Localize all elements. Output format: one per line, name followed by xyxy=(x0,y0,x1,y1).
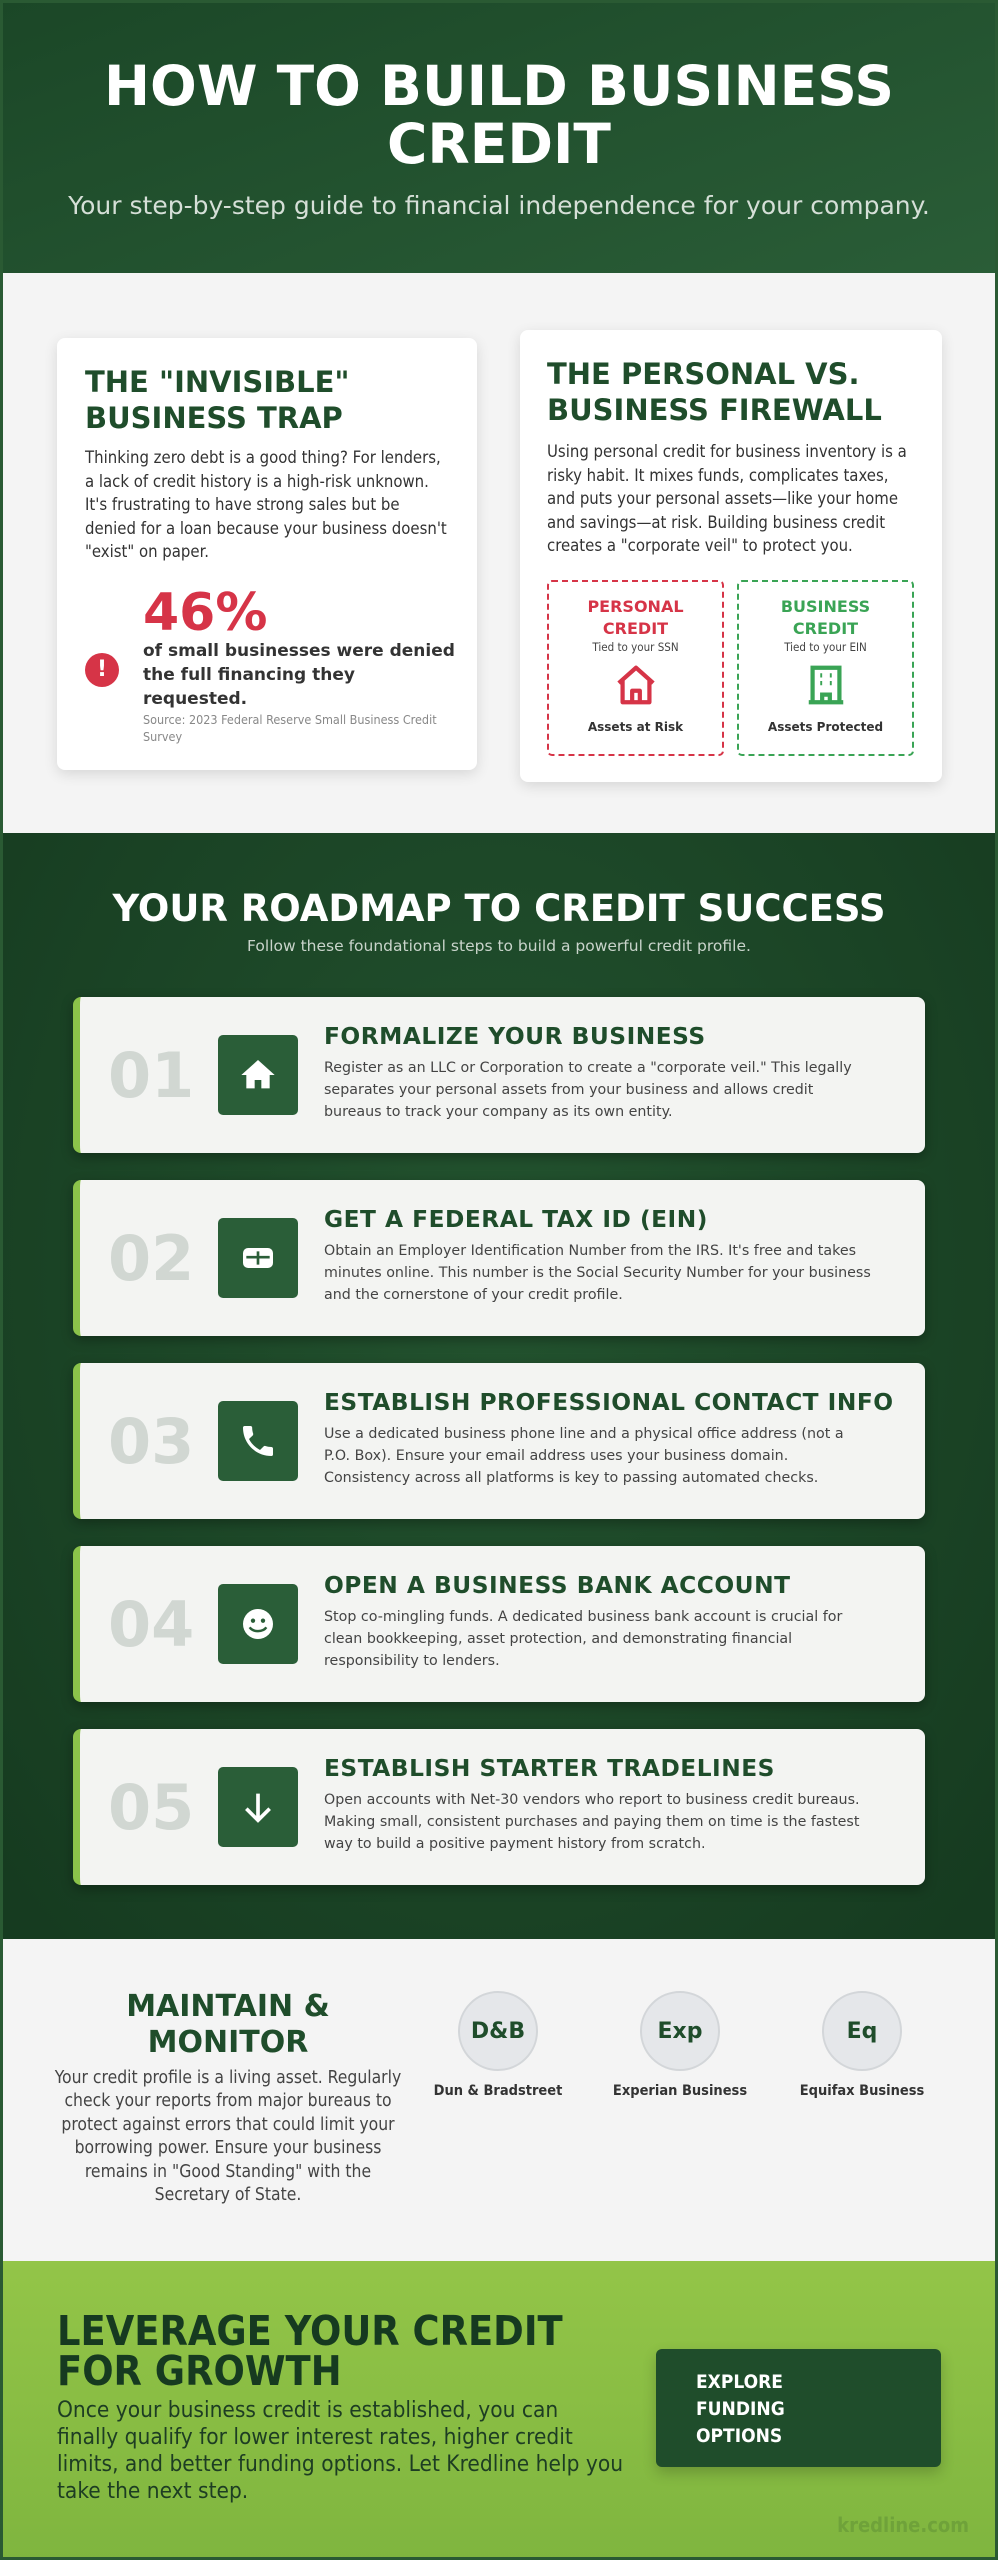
panel: invisible business trap: a lack of credit history is a high-risk unknown. xyxy=(85,472,429,490)
text: borrowing power. Ensure your business xyxy=(75,2138,381,2158)
stat callout: of small businesses were denied the full financing they requested. xyxy=(143,641,455,709)
brand: kredline.com xyxy=(837,2513,969,2537)
panel: personal vs business firewall: THE PERSONAL VS. xyxy=(547,357,860,391)
stat callout: Source: 2023 Federal Reserve Small Business Credit Survey xyxy=(143,712,437,744)
panel: personal vs business firewall: Using personal credit for business inventory is a risky habit. It mixes funds, complicates taxes, and puts your personal assets—like your home and savings—at risk. Building business credit creates a "corporate veil" to protect you. xyxy=(547,442,907,555)
icon: home xyxy=(218,1035,298,1115)
bureau: Experian xyxy=(613,1991,747,2099)
step 02 xyxy=(73,1180,925,1336)
box: business credit xyxy=(737,580,914,756)
stat callout xyxy=(85,583,455,744)
panel: invisible business trap: THE "INVISIBLE" xyxy=(85,365,350,399)
panel: invisible business trap: BUSINESS TRAP xyxy=(85,401,343,435)
icon: alert: ! xyxy=(97,657,107,682)
stat callout: 46% xyxy=(143,583,267,643)
icon: alert xyxy=(85,653,119,687)
icon: arrow down xyxy=(218,1767,298,1847)
step 02: GET A FEDERAL TAX ID (EIN) xyxy=(324,1206,708,1233)
cta text: Once your business credit is established, you can xyxy=(57,2397,558,2423)
cta text xyxy=(57,2397,623,2504)
panel: personal vs business firewall: BUSINESS FIREWALL xyxy=(547,393,882,427)
step 03: Use a dedicated business phone line and a physical office address (not a P.O. Box). Ensure your email address uses your business domain. Consistency across all platforms is key to passing automated checks. xyxy=(324,1426,844,1486)
title xyxy=(104,54,894,176)
step 03 xyxy=(73,1363,925,1519)
icon: bank xyxy=(218,1584,298,1664)
cta text: finally qualify for lower interest rates, higher credit xyxy=(57,2424,573,2450)
step 04: Stop co-mingling funds. A dedicated business bank account is crucial for clean bookkeeping, asset protection, and demonstrating financial responsibility to lenders. xyxy=(324,1609,842,1669)
roadmap heading: YOUR ROADMAP TO CREDIT SUCCESS xyxy=(112,887,886,930)
bureau: Experian: Experian Business xyxy=(613,2083,747,2099)
step 04: 04 xyxy=(108,1588,194,1661)
step 04: OPEN A BUSINESS BANK ACCOUNT xyxy=(324,1572,790,1599)
step 05: 05 xyxy=(108,1771,194,1844)
heading xyxy=(126,1989,330,2060)
section: roadmap xyxy=(3,833,995,1939)
cta text: limits, and better funding options. Let Kredline help you xyxy=(57,2451,623,2477)
subtitle: Your step-by-step guide to financial independence for your company. xyxy=(68,191,930,220)
bureau: Equifax: Equifax Business xyxy=(800,2083,924,2099)
button: EXPLORE xyxy=(696,2371,783,2393)
cta text: take the next step. xyxy=(57,2478,248,2504)
box: business credit: BUSINESS xyxy=(781,597,870,616)
box: personal credit: Tied to your SSN xyxy=(592,640,679,654)
heading: MONITOR xyxy=(148,2025,308,2060)
step 05: Open accounts with Net-30 vendors who report to business credit bureaus. Making small, consistent purchases and paying them on time is the fastest way to build a positive payment history from scratch. xyxy=(324,1792,860,1852)
bureau: D&B xyxy=(434,1991,562,2099)
text: Your credit profile is a living asset. Regularly xyxy=(55,2068,401,2088)
section: maintain & monitor xyxy=(3,1939,995,2261)
heading: MAINTAIN & xyxy=(126,1989,330,2024)
panel: invisible business trap: denied for a loan because your business doesn't xyxy=(85,518,447,538)
box: business credit: CREDIT xyxy=(793,619,858,638)
panel: invisible business trap xyxy=(57,338,477,770)
step 05 xyxy=(73,1729,925,1885)
title: CREDIT xyxy=(387,112,611,176)
cta heading: LEVERAGE YOUR CREDIT xyxy=(57,2307,563,2355)
panel: personal vs business firewall xyxy=(520,330,942,782)
button xyxy=(656,2349,941,2467)
panel: invisible business trap: It's frustrating to have strong sales but be xyxy=(85,495,400,514)
step 03: ESTABLISH PROFESSIONAL CONTACT INFO xyxy=(324,1389,894,1416)
box: personal credit xyxy=(547,580,724,756)
text: remains in "Good Standing" with the xyxy=(85,2162,371,2182)
step 02: Obtain an Employer Identification Number from the IRS. It's free and takes minutes online. This number is the Social Security Number for your business and the cornerstone of your credit profile. xyxy=(324,1243,871,1303)
box: personal credit: CREDIT xyxy=(603,619,668,638)
bureau: D&B: D&B xyxy=(471,2018,525,2044)
bureau: D&B: Dun & Bradstreet xyxy=(434,2083,562,2099)
bureau: Equifax xyxy=(800,1991,924,2099)
panel: invisible business trap: "exist" on paper. xyxy=(85,542,209,561)
header xyxy=(3,3,995,273)
panel: invisible business trap: Thinking zero debt is a good thing? For lenders, xyxy=(85,448,441,467)
step 03: 03 xyxy=(108,1405,194,1478)
text: check your reports from major bureaus to xyxy=(64,2091,392,2111)
bureau: Equifax: Eq xyxy=(847,2018,877,2044)
text xyxy=(54,2068,401,2205)
box: business credit: Tied to your EIN xyxy=(784,640,867,654)
step 01 xyxy=(73,997,925,1153)
cta heading: FOR GROWTH xyxy=(57,2347,342,2395)
bureau: Experian: Exp xyxy=(658,2018,702,2044)
box: personal credit: PERSONAL xyxy=(587,597,684,616)
icon: id card xyxy=(218,1218,298,1298)
step 04 xyxy=(73,1546,925,1702)
title: HOW TO BUILD BUSINESS xyxy=(104,54,894,118)
step 01: FORMALIZE YOUR BUSINESS xyxy=(324,1023,706,1050)
text: Secretary of State. xyxy=(155,2185,301,2205)
roadmap subtitle: Follow these foundational steps to build a powerful credit profile. xyxy=(247,937,751,955)
button: OPTIONS xyxy=(696,2425,782,2447)
step 05: ESTABLISH STARTER TRADELINES xyxy=(324,1755,775,1782)
text: protect against errors that could limit your xyxy=(61,2115,395,2135)
step 02: 02 xyxy=(108,1222,194,1295)
box: business credit: Assets Protected xyxy=(768,720,883,734)
icon: phone xyxy=(218,1401,298,1481)
section: problems xyxy=(3,273,995,833)
section: call to action xyxy=(3,2261,995,2560)
button: FUNDING xyxy=(696,2398,785,2420)
box: personal credit: Assets at Risk xyxy=(588,720,683,734)
step 01: 01 xyxy=(108,1039,194,1112)
step 01: Register as an LLC or Corporation to create a "corporate veil." This legally separates your personal assets from your business and allows credit bureaus to track your company as its own entity. xyxy=(324,1060,852,1120)
cta heading xyxy=(57,2307,563,2395)
